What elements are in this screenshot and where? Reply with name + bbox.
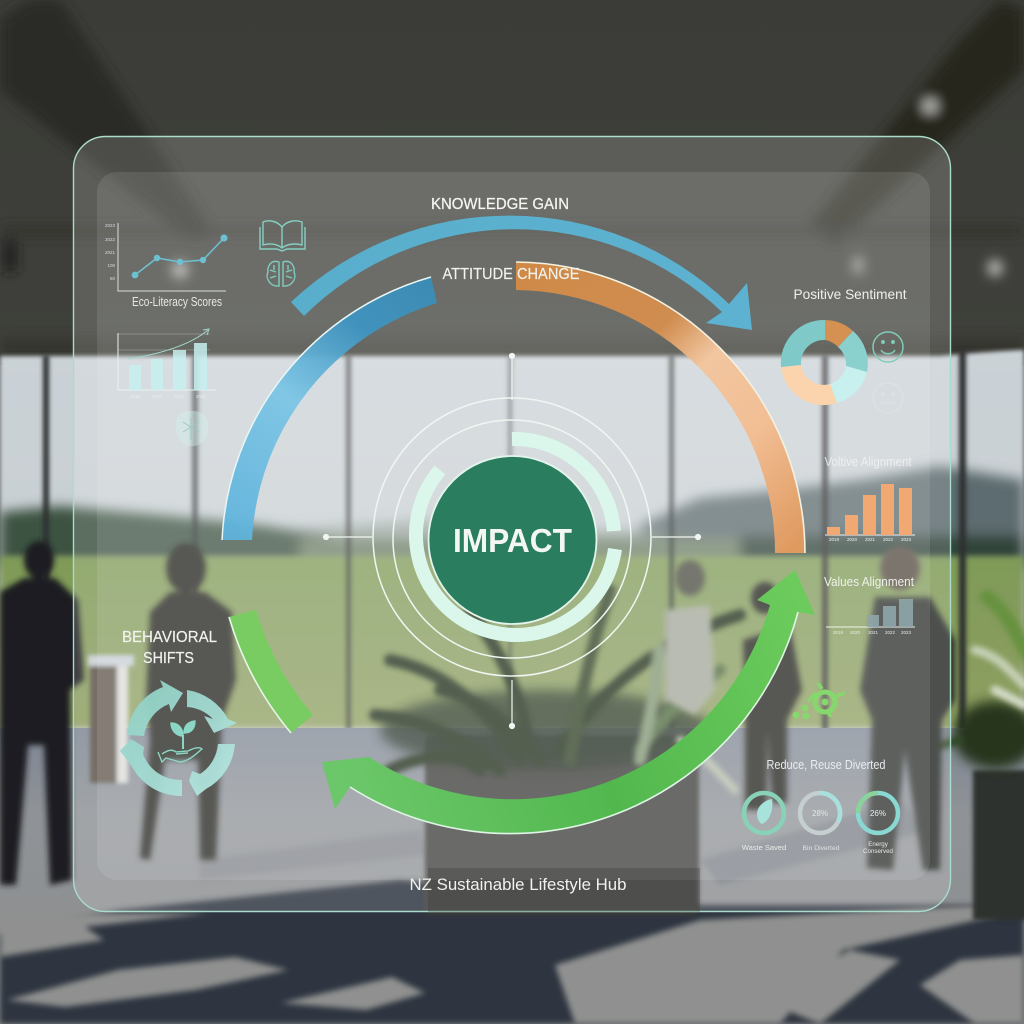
icon: smiley face: [873, 332, 903, 362]
icon: brain: [267, 261, 295, 286]
hub green disc: [428, 456, 596, 624]
outer glass panel: [74, 136, 950, 912]
title: impact: IMPACT: [453, 522, 572, 559]
line chart: eco-literacy scores: 2023: [105, 223, 115, 228]
heading: behavioral shifts: BEHAVIORAL: [122, 629, 217, 646]
label: positive sentiment: Positive Sentiment: [794, 286, 907, 302]
ring gauge: energy conserved: [858, 793, 898, 855]
window mullions: [43, 350, 966, 730]
loop arrows: [120, 680, 237, 796]
icon: green gear cluster: [793, 683, 845, 719]
footer: hub name: [410, 868, 700, 912]
bar chart: growth: 2020: [152, 394, 163, 399]
label: energy conserved: Energy: [868, 841, 889, 848]
line chart: eco-literacy scores: 2022: [105, 237, 115, 242]
label: voltive alignment: Voltive Alignment: [824, 454, 912, 469]
label: energy conserved: Conserved: [863, 848, 894, 855]
ceiling: [0, 0, 1024, 365]
inner glass panel: [97, 172, 930, 880]
footer: hub name: NZ Sustainable Lifestyle Hub: [410, 875, 626, 894]
label: eco-literacy scores: Eco-Literacy Scores: [132, 294, 222, 309]
ring gauge: bin diverted: [800, 793, 840, 852]
arc: blue inner left: [222, 277, 437, 540]
bar chart: grey alignment: 2020: [850, 630, 861, 635]
bar chart: grey alignment: 2019: [833, 630, 844, 635]
arc: attitude change orange: [516, 262, 805, 553]
line chart: eco-literacy scores: [105, 223, 228, 309]
label: values alignment: Values Alignment: [824, 574, 914, 589]
line chart: eco-literacy scores: 100: [107, 263, 115, 268]
label: waste saved: Waste Saved: [742, 843, 786, 852]
bar chart: grey alignment: 2023: [901, 630, 912, 635]
central hub: [324, 354, 700, 728]
line chart: eco-literacy scores: 60: [110, 276, 115, 281]
bar chart: orange alignment: 2020: [847, 537, 858, 542]
left side stand: [88, 655, 134, 783]
bar chart: orange alignment: 2019: [829, 537, 840, 542]
line chart: eco-literacy scores: 2021: [105, 250, 115, 255]
arrow: behavioral green sweep: [322, 570, 815, 834]
heading: knowledge gain: KNOWLEDGE GAIN: [431, 196, 569, 213]
label: bin diverted: Bin Diverted: [802, 845, 840, 852]
floor with shadows: [0, 728, 1024, 1024]
icon: faded brain: [176, 411, 208, 446]
bar chart: grey alignment: [826, 599, 915, 635]
icon: open book: [260, 221, 305, 251]
bar chart: growth: 2021: [174, 394, 185, 399]
arc: green lower left: [229, 610, 313, 733]
ring gauge: waste saved: [742, 793, 786, 852]
arrow: knowledge gain blue arc: [291, 216, 752, 330]
bar chart: grey alignment: 2021: [868, 630, 879, 635]
bar chart: orange alignment: 2021: [865, 537, 876, 542]
icon: recycling loop with hand and plant: [120, 680, 237, 796]
bar chart: grey alignment: 2022: [885, 630, 896, 635]
ring gauge: bin diverted: 28%: [812, 809, 828, 818]
bar chart: growth: 2022: [196, 394, 207, 399]
silhouettes of people: [0, 541, 955, 885]
bar chart: orange alignment: 2022: [883, 537, 894, 542]
donut chart: positive sentiment: [781, 320, 868, 405]
hub rings: [373, 398, 651, 676]
hub progress arcs: [416, 439, 615, 635]
label: reduce, reuse diverted: Reduce, Reuse Diverted: [766, 758, 886, 772]
bar chart: growth: [118, 329, 216, 399]
window view: sky, hills, lawn: [0, 350, 1024, 737]
heading: attitude change: ATTITUDE CHANGE: [442, 266, 580, 283]
bar chart: growth: 2019: [130, 394, 141, 399]
bar chart: orange alignment: 2023: [901, 537, 912, 542]
right-hand plant: [925, 597, 1024, 920]
heading: behavioral shifts: SHIFTS: [143, 650, 194, 667]
plant and planter: [375, 590, 740, 915]
bar chart: orange alignment: [825, 484, 915, 542]
icon: neutral face: [873, 383, 903, 413]
ring gauge: energy conserved: 26%: [870, 809, 886, 818]
plant in hand: [158, 721, 202, 762]
hub axis lines: [324, 354, 700, 728]
